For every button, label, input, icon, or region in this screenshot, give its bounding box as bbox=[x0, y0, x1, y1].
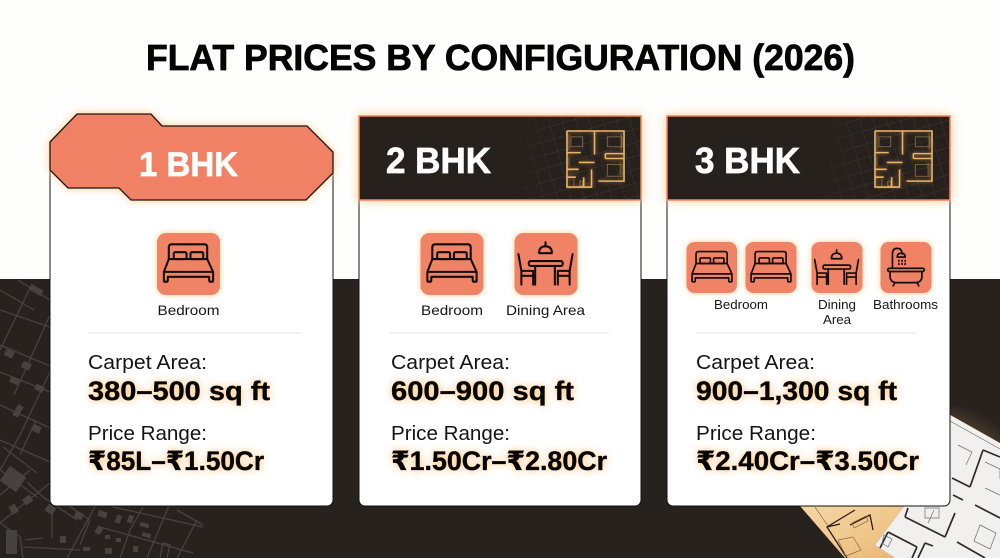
icon: bedroom bbox=[420, 233, 484, 295]
street map pattern: lower left bbox=[0, 280, 203, 558]
price range: ₹1.50Cr–₹2.80Cr bbox=[391, 446, 607, 476]
price range bbox=[696, 423, 919, 476]
price range: Price Range: bbox=[391, 423, 510, 445]
card body bbox=[50, 165, 333, 506]
icon: dining area bbox=[812, 242, 862, 293]
carpet area bbox=[88, 352, 270, 406]
carpet area: 900–1,300 sq ft bbox=[696, 376, 897, 406]
icon: bathrooms bbox=[880, 242, 932, 293]
price range: ₹2.40Cr–₹3.50Cr bbox=[696, 446, 919, 476]
carpet area: 380–500 sq ft bbox=[88, 376, 270, 406]
label: dining area: Area bbox=[823, 312, 852, 327]
carpet area: Carpet Area: bbox=[391, 352, 510, 374]
header banner: 2 BHK bbox=[359, 116, 641, 200]
carpet area: Carpet Area: bbox=[696, 352, 815, 374]
header banner: 1 BHK: 1 BHK bbox=[139, 146, 238, 184]
price range: Price Range: bbox=[696, 423, 816, 445]
price range bbox=[88, 423, 264, 476]
carpet area: Carpet Area: bbox=[88, 352, 207, 374]
icon: bedroom bbox=[157, 233, 220, 295]
icon: bedroom 2 bbox=[746, 242, 796, 293]
card body bbox=[667, 195, 950, 506]
blueprint sheets: lower right bbox=[800, 400, 1000, 558]
label: bathrooms: Bathrooms bbox=[873, 297, 939, 312]
title: FLAT PRICES BY CONFIGURATION (2026) bbox=[146, 37, 855, 78]
label: dining area: Dining bbox=[818, 297, 856, 312]
header banner: 2 BHK: 2 BHK bbox=[386, 140, 491, 181]
label: bedroom: Bedroom bbox=[421, 302, 483, 318]
card body bbox=[359, 195, 641, 506]
price range: ₹85L–₹1.50Cr bbox=[88, 446, 264, 476]
carpet area: 600–900 sq ft bbox=[391, 376, 574, 406]
label: dining area bbox=[818, 297, 856, 327]
panel: 3 BHK card bbox=[667, 116, 950, 506]
header banner: 3 BHK bbox=[667, 116, 950, 200]
header banner: 3 BHK: 3 BHK bbox=[695, 140, 800, 181]
label: bedroom: Bedroom bbox=[158, 302, 220, 318]
panel: 2 BHK card bbox=[359, 116, 641, 506]
carpet area bbox=[696, 352, 897, 406]
icon: dining area bbox=[514, 233, 578, 295]
label: bedroom: Bedroom bbox=[714, 297, 768, 312]
dark lower background band bbox=[0, 279, 1000, 558]
header banner: 1 BHK bbox=[50, 114, 333, 200]
price range bbox=[391, 423, 607, 476]
carpet area bbox=[391, 352, 574, 406]
icon: bedroom 1 bbox=[686, 242, 737, 293]
price range: Price Range: bbox=[88, 423, 207, 445]
panel: 1 BHK card bbox=[50, 114, 333, 506]
label: dining area: Dining Area bbox=[506, 302, 585, 318]
